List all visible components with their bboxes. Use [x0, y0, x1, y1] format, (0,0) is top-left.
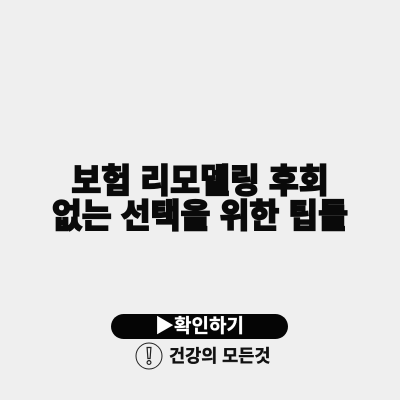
button label: ▶확인하기 [155, 316, 244, 337]
title line 1: 보험 리모델링 후회 [71, 162, 329, 200]
brand name: 건강의 모든것 [169, 346, 270, 366]
title line 2: 없는 선택을 위한 팁들 [52, 197, 348, 235]
button: confirm [111, 314, 288, 339]
icon: exclamation in circle [136, 342, 162, 370]
title [52, 162, 348, 235]
